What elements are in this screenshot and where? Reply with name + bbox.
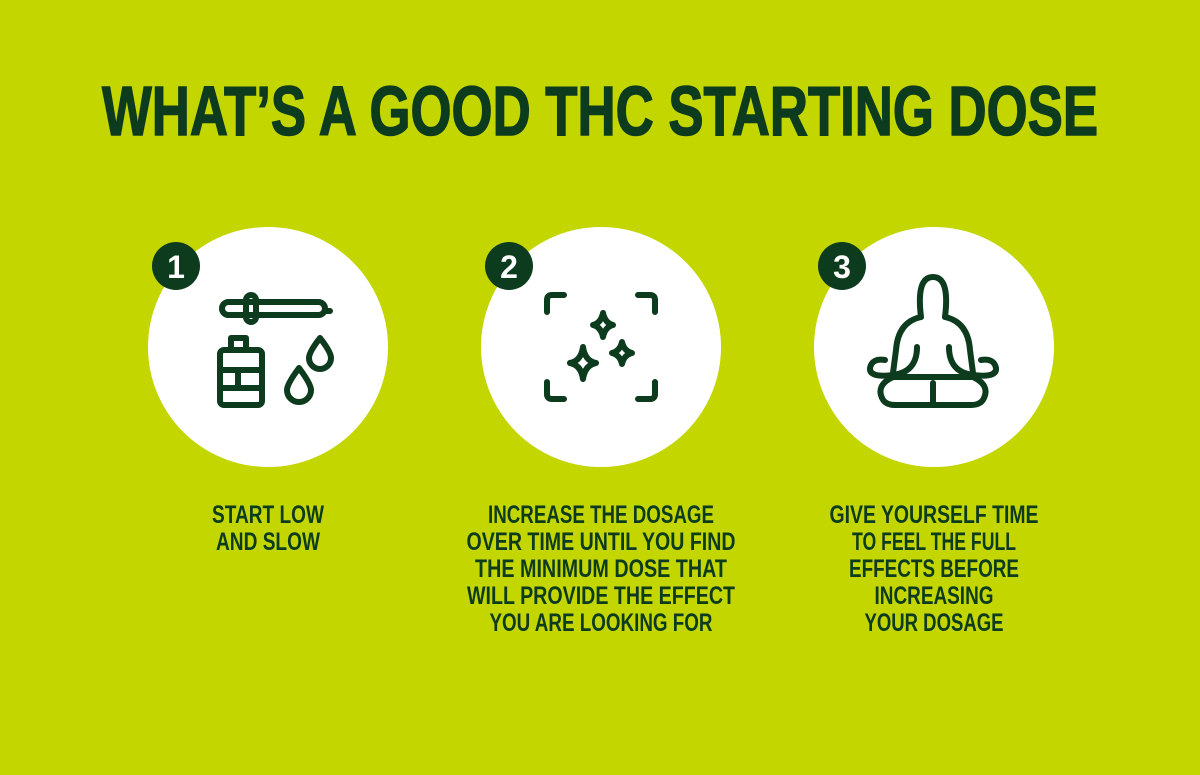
badge 3	[818, 242, 866, 290]
panel: give time	[814, 227, 1054, 637]
badge 1	[152, 242, 200, 290]
badge 2: 2	[500, 249, 518, 285]
text 3: YOUR DOSAGE	[864, 609, 1004, 637]
circle 2	[481, 227, 721, 467]
text 2: THE MINIMUM DOSE THAT	[475, 555, 727, 583]
circle 1	[148, 227, 388, 467]
panel: start low	[148, 227, 388, 556]
text 3: TO FEEL THE FULL	[852, 528, 1016, 556]
text 2: INCREASE THE DOSAGE	[488, 501, 714, 529]
text 1: AND SLOW	[216, 528, 320, 556]
text 1: START LOW	[212, 501, 324, 529]
text 2: WILL PROVIDE THE EFFECT	[467, 582, 735, 610]
text 3	[830, 501, 1038, 637]
badge 1: 1	[167, 249, 185, 285]
badge 2	[485, 242, 533, 290]
text 3: INCREASING	[874, 582, 994, 610]
circle 3	[814, 227, 1054, 467]
panel: increase	[466, 227, 736, 637]
icon: meditating person	[870, 277, 996, 405]
text 2: YOU ARE LOOKING FOR	[490, 609, 712, 637]
badge 3: 3	[833, 249, 851, 285]
text 2	[466, 501, 736, 637]
text 3: GIVE YOURSELF TIME	[830, 501, 1038, 529]
icon: sparkles frame	[547, 295, 655, 399]
icon: dropper and bottle	[220, 295, 331, 405]
text 2: OVER TIME UNTIL YOU FIND	[466, 528, 736, 556]
text 1	[212, 501, 324, 556]
text 3: EFFECTS BEFORE	[849, 555, 1019, 583]
